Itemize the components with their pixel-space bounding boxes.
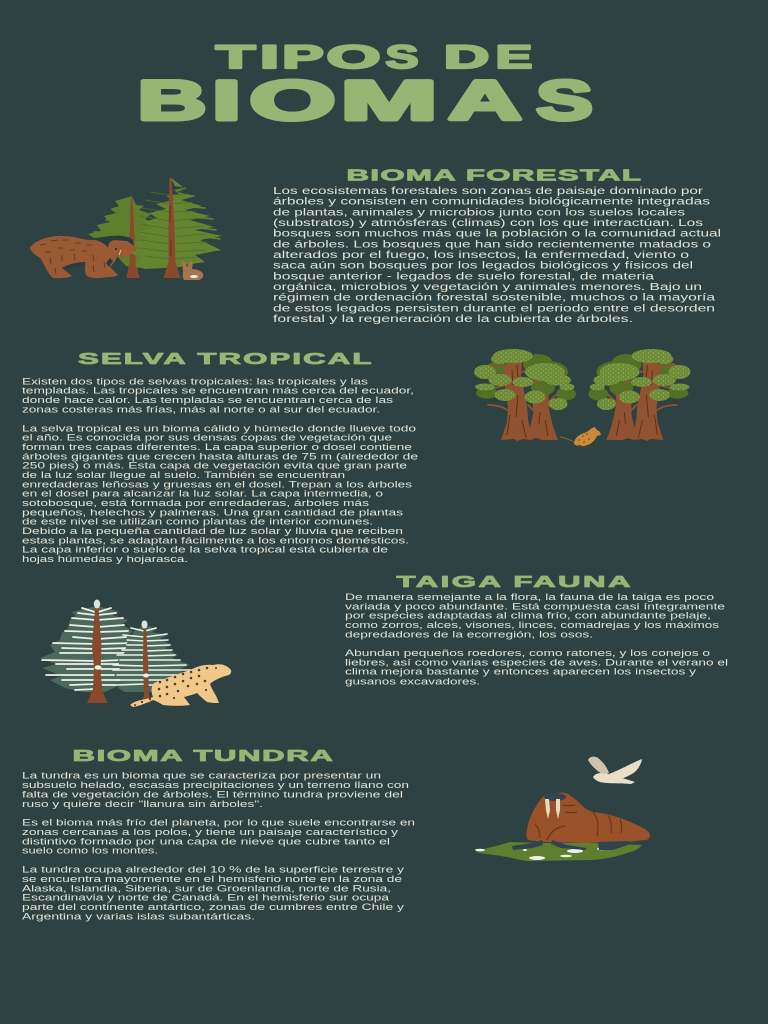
text block: bioma tundra: suelo como los montes. <box>22 846 158 856</box>
text block: bioma forestal: bosque anterior - legados de suelo forestal, de materia <box>273 271 655 282</box>
illustration: walrus, bird and tundra ground <box>475 757 650 861</box>
text block: selva tropical: La selva tropical es un bioma cálido y húmedo donde llueve todo <box>22 423 416 433</box>
text block: bioma forestal: de árboles. Los bosques que han sido recientemente matados o <box>273 239 711 250</box>
text block: selva tropical: de este nivel se utilizan como plantas de interior comunes. <box>22 517 373 527</box>
illustration: snowy pines and leopard <box>40 600 231 707</box>
text block: selva tropical: de la luz solar llegue al suelo. También se encuentran <box>22 470 345 480</box>
text block: bioma tundra: falta de vegetación de árboles. El término tundra proviene del <box>22 790 403 800</box>
text block: bioma tundra: Alaska, Islandia, Siberia, sur de Groenlandia, norte de Rusia, <box>22 883 391 893</box>
title line: tipos de: T <box>216 39 255 75</box>
title line: tipos de: O <box>327 39 380 75</box>
icon: pine tree small <box>88 196 163 278</box>
text block: taiga fauna: gusanos excavadores. <box>345 676 480 686</box>
panel: selva tropical <box>22 350 418 564</box>
text block: taiga fauna: por especies adaptadas al clima frío, con abundante pelaje, <box>345 611 711 621</box>
icon: snowy pine small <box>113 620 191 703</box>
title line: biomas: I <box>212 69 241 132</box>
title line: tipos de <box>216 39 532 75</box>
title line: biomas: B <box>138 69 206 132</box>
text block: bioma tundra: subsuelo helado, escasas precipitaciones y un terreno llano con <box>22 780 409 790</box>
text block: selva tropical: hojas húmedas y hojarasca. <box>22 554 188 564</box>
title line: tipos de: P <box>282 39 324 75</box>
text block: bioma tundra: La tundra ocupa alrededor del 10 % de la superficie terrestre y <box>22 865 405 875</box>
text block: selva tropical: 250 pies) o más. Esta capa de vegetación evita que gran parte <box>22 461 407 471</box>
icon: rodent <box>560 427 601 447</box>
title line: tipos de: E <box>496 39 532 75</box>
text block: taiga fauna: liebres, así como varias especies de aves. Durante el verano el <box>345 657 728 667</box>
text block: bioma forestal: alterados por el fuego, los insectos, la enfermedad, viento o <box>273 250 689 261</box>
text block: bioma tundra: Argentina y varias islas subantárticas. <box>22 911 255 921</box>
illustration: bear, pines and rabbit <box>30 177 222 280</box>
text block: selva tropical: Existen dos tipos de selvas tropicales: las tropicales y las <box>22 376 369 386</box>
text block: selva tropical: templadas. Las tropicales se encuentran más cerca del ecuador, <box>22 386 414 396</box>
text block: selva tropical: árboles gigantes que crecen hasta alturas de 75 m (alrededor de <box>22 451 418 461</box>
panel: bioma forestal <box>273 167 721 325</box>
text block: selva tropical: enredaderas leñosas y gruesas en el dosel. Trepan a los árboles <box>22 479 413 489</box>
text block: selva tropical: donde hace calor. Las templadas se encuentran cerca de las <box>22 395 394 405</box>
text block: selva tropical: el año. Es conocida por sus densas copas de vegetación que <box>22 433 392 443</box>
icon: walrus <box>512 793 650 850</box>
title line: biomas: M <box>341 70 437 132</box>
heading: taiga fauna: TAIGA FAUNA <box>396 573 631 591</box>
panel: taiga fauna <box>345 573 728 686</box>
text block: bioma forestal: (substratos) y atmósferas (climas) con los que interactúan. Los <box>273 218 703 229</box>
text block: bioma tundra: distintivo formado por una capa de nieve que cubre tanto el <box>22 836 390 846</box>
text block: selva tropical: en el dosel para alcanzar la luz solar. La capa intermedia, o <box>22 489 383 499</box>
text block: taiga fauna: como zorros, alces, visones, linces, comadrejas y los máximos <box>345 620 720 630</box>
text block: bioma forestal: de estos legados persisten durante el periodo entre el desorden <box>273 303 715 314</box>
text block: taiga fauna <box>345 592 728 686</box>
text block: taiga fauna: Abundan pequeños roedores, como ratones, y los conejos o <box>345 648 710 658</box>
text block: bioma forestal: forestal y la regeneración de la cubierta de árboles. <box>273 314 633 325</box>
title line: biomas: S <box>536 70 593 132</box>
text block: bioma forestal: de plantas, animales y microbios junto con los suelos locales <box>273 207 685 218</box>
icon: bird <box>588 757 642 784</box>
text block: bioma tundra <box>22 771 415 921</box>
heading: bioma forestal: BIOMA FORESTAL <box>346 167 641 184</box>
illustration: rainforest trees and rodent <box>474 349 690 447</box>
text block: bioma tundra: La tundra es un bioma que se caracteriza por presentar un <box>22 771 381 781</box>
icon: pine tree large <box>130 177 222 278</box>
text block: selva tropical: estas plantas, se adaptan fácilmente a los entornos domésticos. <box>22 535 409 545</box>
text block: bioma tundra: Escandinavia y norte de Canadá. En el hemisferio sur ocupa <box>22 893 389 903</box>
text block: bioma forestal: orgánica, microbios y vegetación y animales menores. Bajo un <box>273 282 702 293</box>
title line: tipos de: D <box>444 39 489 75</box>
text block: selva tropical: La capa inferior o suelo de la selva tropical está cubierta de <box>22 545 388 555</box>
icon: snowy pine large <box>40 600 140 703</box>
heading: selva tropical: SELVA TROPICAL <box>78 350 371 368</box>
icon: snow leopard <box>130 664 231 707</box>
text block: bioma forestal: árboles y consisten en comunidades biológicamente integradas <box>273 197 710 208</box>
text block: selva tropical: pequeños, helechos y palmeras. Una gran cantidad de plantas <box>22 507 404 517</box>
text block: bioma forestal: régimen de ordenación forestal sostenible, muchos o la mayoría <box>273 293 716 304</box>
text block: taiga fauna: depredadores de la ecorregión, los osos. <box>345 629 593 639</box>
icon: tundra ground <box>475 842 642 861</box>
heading: bioma tundra: BIOMA TUNDRA <box>72 747 333 765</box>
title <box>138 39 593 132</box>
text block: taiga fauna: clima mejora bastante y entonces aparecen los insectos y <box>345 667 697 677</box>
text block: selva tropical: sotobosque, está formada por enredaderas, árboles más <box>22 498 370 508</box>
text block: bioma forestal <box>273 186 721 325</box>
title line: biomas: A <box>448 70 522 132</box>
text block: selva tropical: zonas costeras más frías, más al norte o al sur del ecuador. <box>22 404 380 414</box>
title line: tipos de: S <box>386 39 418 75</box>
title line: biomas <box>138 69 593 132</box>
text block: bioma tundra: zonas cercanas a los polos, y tiene un paisaje característico y <box>22 827 399 837</box>
icon: rainforest tree right <box>588 349 690 441</box>
icon: bear <box>30 236 135 278</box>
text block: selva tropical: Debido a la pequeña cantidad de luz solar y lluvia que reciben <box>22 526 403 536</box>
text block: bioma forestal: saca aún son bosques por los legados biológicos y físicos del <box>273 261 693 272</box>
text block: bioma tundra: se encuentra mayormente en el hemisferio norte en la zona de <box>22 874 402 884</box>
text block: bioma tundra: ruso y quiere decir "llanura sin árboles". <box>22 799 263 809</box>
icon: rainforest tree left <box>474 349 576 441</box>
title line: tipos de: I <box>260 40 279 75</box>
text block: bioma forestal: bosques son muchos más que la población o la comunidad actual <box>273 229 721 240</box>
text block: selva tropical: forman tres capas diferentes. La capa superior o dosel contiene <box>22 442 412 452</box>
text block: bioma tundra: Es el bioma más frío del planeta, por lo que suele encontrarse en <box>22 818 415 828</box>
title line: biomas: O <box>250 69 335 132</box>
text block: taiga fauna: variada y poco abundante. Está compuesta casi íntegramente <box>345 601 725 611</box>
panel: bioma tundra <box>22 747 415 921</box>
icon: rabbit <box>182 261 203 280</box>
text block: bioma forestal: Los ecosistemas forestales son zonas de paisaje dominado por <box>273 186 704 197</box>
text block: taiga fauna: De manera semejante a la flora, la fauna de la taiga es poco <box>345 592 714 602</box>
text block: selva tropical <box>22 376 418 564</box>
text block: bioma tundra: parte del continente antártico, zonas de cumbres entre Chile y <box>22 902 405 912</box>
